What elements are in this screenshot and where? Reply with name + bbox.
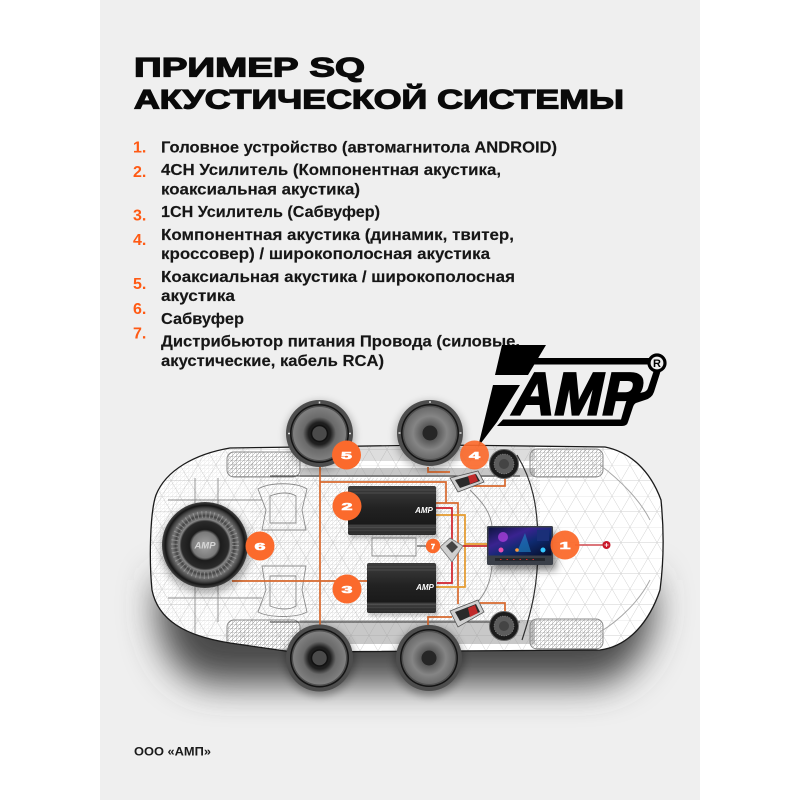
pointer to distributor xyxy=(417,545,428,547)
list text: Дистрибьютор питания Провода (силовые, xyxy=(161,334,520,350)
amplifier 3 logo: AMP xyxy=(415,583,435,592)
badge 2 xyxy=(332,492,362,520)
speaker: rear bottom coaxial xyxy=(285,624,355,696)
list text: 1CH Усилитель (Сабвуфер) xyxy=(161,204,380,221)
list numbers: 1. xyxy=(133,140,146,156)
list text: Коаксиальная акустика / широкополосная xyxy=(161,269,515,286)
logo wordmark: AMP xyxy=(507,360,650,427)
orange speaker wires xyxy=(232,467,505,627)
list text: акустические, кабель RCA) xyxy=(161,353,384,370)
badge 5 xyxy=(332,440,361,470)
footer company name: ООО «АМП» xyxy=(134,746,211,758)
head unit screen details xyxy=(498,530,549,552)
speaker: front bottom component xyxy=(394,625,464,696)
list numbers: 3. xyxy=(133,208,146,224)
badge 7: 7 xyxy=(431,544,435,551)
side sills xyxy=(270,476,520,622)
crossover: bottom xyxy=(450,600,484,627)
list numbers: 5. xyxy=(133,276,146,293)
badge 4: 4 xyxy=(469,450,480,462)
list numbers: 7. xyxy=(133,326,146,342)
output wire to dot xyxy=(575,544,606,546)
tweeter: bottom xyxy=(490,612,518,640)
red power wires xyxy=(436,508,452,583)
car body xyxy=(150,445,663,652)
car wireframe xyxy=(145,440,670,655)
badge 6 xyxy=(246,532,274,560)
title xyxy=(134,52,624,114)
title: АКУСТИЧЕСКОЙ СИСТЕМЫ xyxy=(134,84,624,114)
amplifier 2 xyxy=(348,486,438,539)
list text: Сабвуфер xyxy=(161,311,244,328)
badge 2: 2 xyxy=(342,501,353,513)
wheel arches xyxy=(227,449,603,650)
subwoofer logo: AMP xyxy=(193,540,216,552)
list numbers xyxy=(133,140,146,342)
list text xyxy=(161,140,557,370)
logo frame xyxy=(497,358,661,426)
badge 6: 6 xyxy=(254,541,266,553)
background panel xyxy=(100,0,700,800)
amplifier 2 logo: AMP xyxy=(414,506,434,515)
seats xyxy=(168,478,492,640)
badge 3: 3 xyxy=(342,584,353,596)
registered mark: R xyxy=(653,358,661,370)
list text: коаксиальная акустика) xyxy=(161,182,360,198)
speaker: rear top coaxial xyxy=(285,400,355,471)
registered mark xyxy=(649,355,665,371)
badge 1: 1 xyxy=(560,540,571,552)
list text: кроссовер) / широкополосная акустика xyxy=(161,246,490,263)
car outline xyxy=(150,445,663,652)
badge 5: 5 xyxy=(341,450,352,462)
list text: 4CH Усилитель (Компонентная акустика, xyxy=(161,162,501,179)
list numbers: 4. xyxy=(133,232,146,249)
tweeter: top xyxy=(490,450,518,478)
badge 3 xyxy=(332,574,362,604)
list text: Головное устройство (автомагнитола ANDROID) xyxy=(161,140,557,156)
car shadow xyxy=(157,580,653,684)
badge 4 xyxy=(460,440,489,470)
head unit xyxy=(487,526,556,570)
power distributor xyxy=(440,538,463,562)
side sill bands xyxy=(300,447,535,644)
amber RCA wires xyxy=(436,515,487,587)
AMP logo xyxy=(478,345,665,447)
numbered list xyxy=(133,140,557,370)
badge 7 xyxy=(426,539,440,553)
list text: Компонентная акустика (динамик, твитер, xyxy=(161,227,514,244)
wiring xyxy=(232,467,505,627)
speaker: front top component xyxy=(395,400,465,471)
indicator dot xyxy=(602,541,610,549)
amplifier 3 xyxy=(367,563,438,616)
crossover: top xyxy=(450,471,484,492)
windshield arc xyxy=(517,455,538,640)
mesh texture xyxy=(145,440,670,655)
list numbers: 6. xyxy=(133,301,146,318)
list numbers: 2. xyxy=(133,164,146,181)
subwoofer xyxy=(161,502,251,594)
title: ПРИМЕР SQ xyxy=(134,52,365,82)
logo lightning bolt xyxy=(478,345,546,447)
list text: акустика xyxy=(161,288,235,305)
badge 1 xyxy=(550,530,580,560)
